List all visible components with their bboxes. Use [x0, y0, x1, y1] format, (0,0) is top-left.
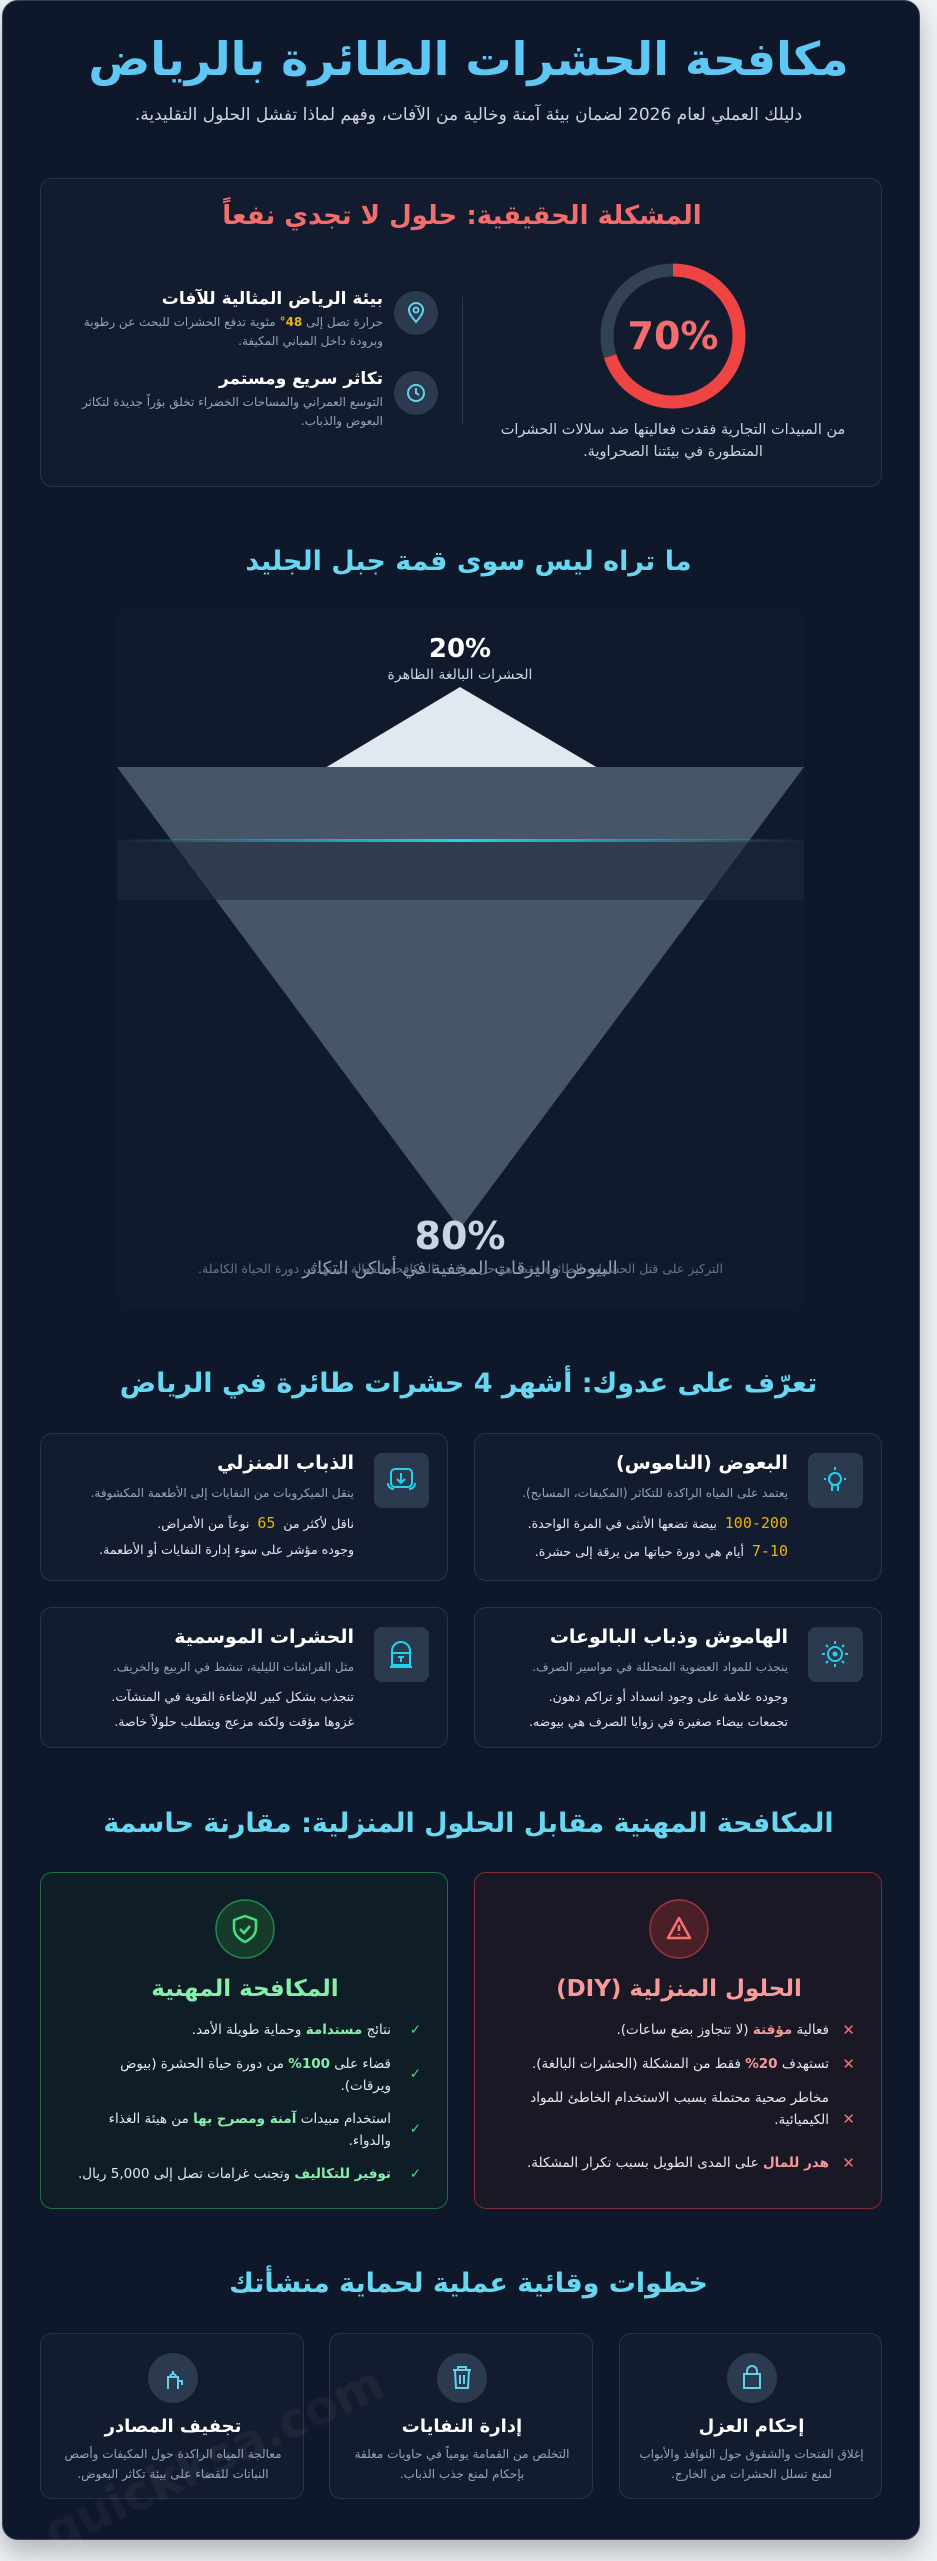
item: riyadh environment	[84, 288, 438, 348]
item: riyadh environment: حرارة تصل إلى 48° مئوية تدفع الحشرات للبحث عن رطوبة وبرودة داخل المباني المكيفة.	[84, 315, 383, 348]
heading: comparison: المكافحة المهنية مقابل الحلول المنزلية: مقارنة حاسمة	[103, 1808, 834, 1839]
panel: professional: ✓	[410, 2066, 421, 2082]
panel: DIY: ✕	[842, 2154, 855, 2172]
panel: drying sources: تجفيف المصادر	[105, 2416, 241, 2437]
panel: house fly: الذباب المنزلي	[217, 1452, 354, 1474]
panel: mosquito: 7-10 أيام هي دورة حياتها من يرقة إلى حشرة.	[535, 1542, 788, 1560]
panel: professional: المكافحة المهنية	[151, 1976, 339, 2002]
chart: iceberg: الحشرات البالغة الظاهرة	[388, 667, 532, 683]
panel: house fly: ناقل لأكثر من 65 نوعاً من الأمراض.	[157, 1514, 354, 1532]
donut caption: من المبيدات التجارية فقدت فعاليتها ضد سلالات الحشرات المتطورة في بيئتنا الصحراوية.	[501, 422, 845, 460]
panel: professional: توفير للتكاليف وتجنب غرامات تصل إلى 5,000 ريال.	[78, 2166, 391, 2182]
panel: professional: استخدام مبيدات آمنة ومصرح بها من هيئة الغذاء والدواء.	[109, 2111, 391, 2149]
icon: tap	[148, 2353, 198, 2403]
panel: DIY: ✕	[842, 2055, 855, 2073]
panel: sealing: إحكام العزل	[699, 2416, 804, 2437]
panel: house fly	[40, 1433, 448, 1581]
panel: mosquito: البعوض (الناموس)	[616, 1452, 788, 1474]
panel: waste management: التخلص من القمامة يومياً في حاويات مغلقة بإحكام لمنع جذب الذباب.	[355, 2447, 569, 2481]
panel: drain flies: وجوده علامة على وجود انسداد أو تراكم دهون.	[549, 1689, 788, 1704]
panel: professional: نتائج مستدامة وحماية طويلة الأمد.	[192, 2022, 391, 2038]
panel: mosquito: 100-200 بيضة تضعها الأنثى في المرة الواحدة.	[528, 1514, 788, 1532]
heading: prevention: خطوات وقائية عملية لحماية منشأتك	[229, 2268, 708, 2299]
icon: shield	[215, 1899, 275, 1959]
panel: waste management	[329, 2333, 593, 2499]
subtitle: دليلك العملي لعام 2026 لضمان بيئة آمنة وخالية من الآفات، وفهم لماذا تفشل الحلول التقليدية.	[135, 105, 802, 125]
heading: iceberg: ما تراه ليس سوى قمة جبل الجليد	[245, 546, 692, 577]
list: professional pros	[78, 2021, 421, 2182]
icon: fly	[374, 1453, 429, 1508]
panel: drying sources	[40, 2333, 304, 2499]
item: fast reproduction: تكاثر سريع ومستمر	[219, 369, 383, 389]
icon: warning	[649, 1899, 709, 1959]
panel: drying sources: معالجة المياه الراكدة حول المكيفات وأصص النباتات للقضاء على بيئة تكاثر البعوض.	[64, 2447, 282, 2481]
icon: location	[394, 291, 438, 335]
panel: house fly: ينقل الميكروبات من النفايات إلى الأطعمة المكشوفة.	[91, 1486, 354, 1500]
donut chart 70%: 70%	[628, 314, 718, 358]
chart: iceberg: التركيز على قتل الحشرات الطائرة فقط هو حل مؤقت. المكافحة الفعالة تستهدف دورة الحياة الكاملة.	[198, 1261, 723, 1276]
panel: drain flies: الهاموش وذباب البالوعات	[550, 1626, 788, 1648]
panel: DIY: هدر للمال على المدى الطويل بسبب تكرار المشكلة.	[527, 2155, 829, 2171]
panel: professional: قضاء على 100% من دورة حياة الحشرة (بيوض ويرقات).	[120, 2056, 391, 2094]
panel: seasonal insects: غزوها مؤقت ولكنه مزعج ويتطلب حلولاً خاصة.	[114, 1714, 354, 1729]
panel: professional: ✓	[410, 2166, 421, 2182]
panel: DIY: فعالية مؤقتة (لا تتجاوز بضع ساعات).	[616, 2022, 829, 2038]
title: مكافحة الحشرات الطائرة بالرياض	[88, 32, 849, 86]
panel: DIY: تستهدف 20% فقط من المشكلة (الحشرات البالغة).	[532, 2056, 829, 2072]
label 20%: 20%	[429, 634, 491, 664]
panel: waste management: إدارة النفايات	[402, 2416, 522, 2437]
icon: lamp	[374, 1627, 429, 1682]
panel: sealing: إغلاق الفتحات والشقوق حول النوافذ والأبواب لمنع تسلل الحشرات من الخارج.	[639, 2447, 864, 2481]
panel: seasonal insects	[40, 1607, 448, 1748]
heading: insects: تعرّف على عدوك: أشهر 4 حشرات طائرة في الرياض	[120, 1368, 817, 1399]
list: DIY cons	[527, 2021, 855, 2172]
panel: drain flies: تجمعات بيضاء صغيرة في زوايا الصرف هي بيوضه.	[529, 1714, 788, 1729]
panel: seasonal insects: الحشرات الموسمية	[174, 1626, 354, 1648]
panel: professional: ✓	[410, 2121, 421, 2137]
panel: seasonal insects: تنجذب بشكل كبير للإضاءة القوية في المنشآت.	[111, 1689, 354, 1704]
icon: clock	[394, 371, 438, 415]
panel: DIY: ✕	[842, 2110, 855, 2128]
panel: house fly: وجوده مؤشر على سوء إدارة النفايات أو الأطعمة.	[99, 1542, 354, 1557]
label 80%: 80%	[415, 1214, 505, 1258]
icon: mosquito	[808, 1453, 863, 1508]
item: fast reproduction	[82, 369, 438, 428]
panel: seasonal insects: مثل الفراشات الليلية، تنشط في الربيع والخريف.	[113, 1660, 354, 1674]
panel: mosquito	[474, 1433, 882, 1581]
item: fast reproduction: التوسع العمراني والمساحات الخضراء تخلق بؤراً جديدة لتكاثر البعوض والذباب.	[82, 395, 383, 428]
panel: professional	[40, 1872, 448, 2209]
donut chart 70%	[600, 264, 746, 408]
panel: DIY: الحلول المنزلية (DIY)	[556, 1976, 802, 2002]
panel: problem	[40, 178, 882, 487]
chart: iceberg	[117, 606, 804, 1308]
panel: DIY: مخاطر صحية محتملة بسبب الاستخدام الخاطئ للمواد الكيميائية.	[530, 2090, 829, 2128]
chart: iceberg: البيوض واليرقات المخفية في أماكن التكاثر	[302, 1258, 618, 1279]
panel: drain flies: ينجذب للمواد العضوية المتحللة في مواسير الصرف.	[532, 1660, 788, 1674]
panel: DIY	[474, 1872, 882, 2209]
icon: lock bag	[727, 2353, 777, 2403]
panel: professional: ✓	[410, 2022, 421, 2038]
panel: drain flies	[474, 1607, 882, 1748]
watermark: quickksa.com	[35, 2355, 393, 2561]
problem heading: المشكلة الحقيقية: حلول لا تجدي نفعاً	[222, 201, 702, 231]
icon: drain fly	[808, 1627, 863, 1682]
panel: sealing	[619, 2333, 882, 2499]
item: riyadh environment: بيئة الرياض المثالية للآفات	[162, 289, 383, 309]
panel: DIY: ✕	[842, 2021, 855, 2039]
icon: trash	[437, 2353, 487, 2403]
panel: mosquito: يعتمد على المياه الراكدة للتكاثر (المكيفات، المسابح).	[522, 1486, 788, 1500]
